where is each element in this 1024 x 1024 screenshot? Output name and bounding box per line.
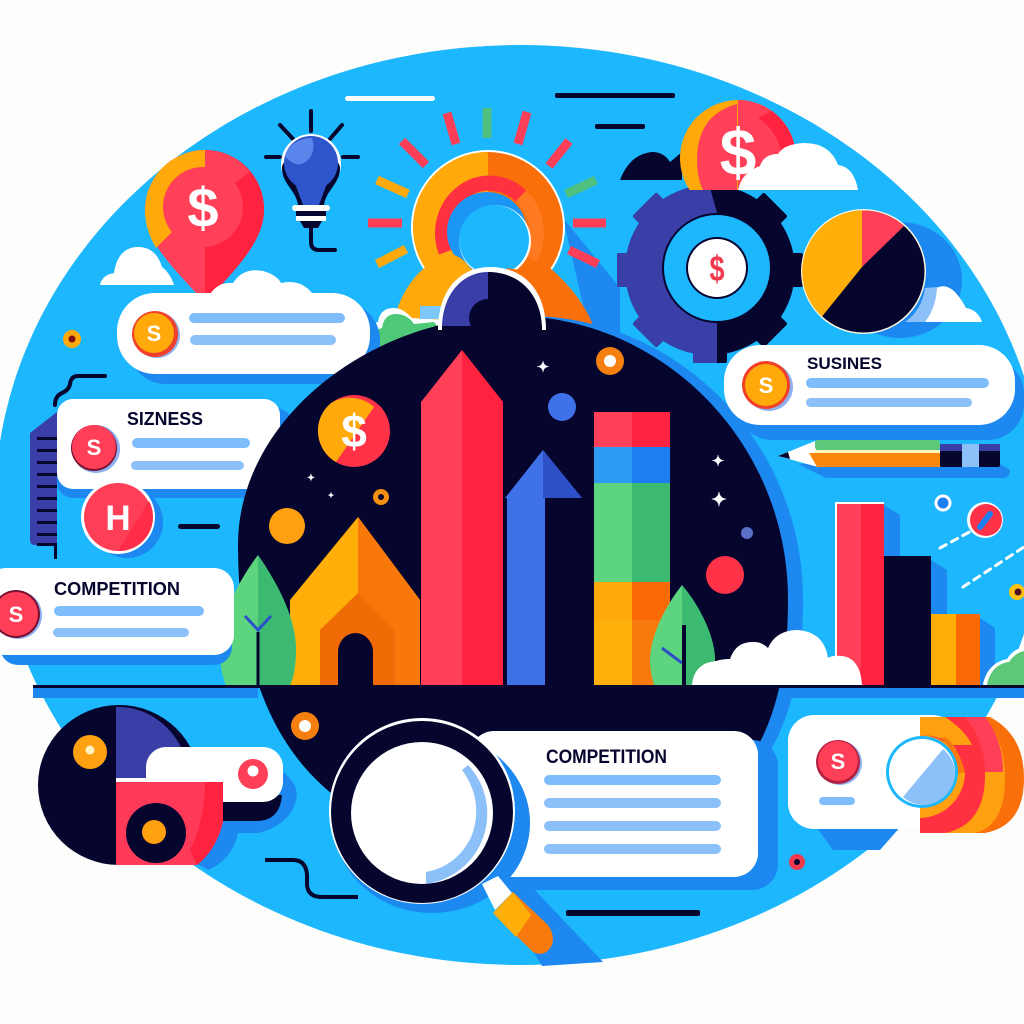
bar chart: main arrows xyxy=(421,350,670,685)
coin xyxy=(71,425,120,473)
card: top left xyxy=(117,293,380,384)
coin: S xyxy=(87,435,101,460)
icon: dark hill xyxy=(620,152,682,180)
scene: dark circle with shadow xyxy=(238,316,803,800)
dots and stars: ✦ xyxy=(307,473,315,484)
knob on top of dark circle xyxy=(438,267,546,337)
coin xyxy=(0,590,42,639)
icon: pie chart xyxy=(801,209,982,338)
card: right with lens xyxy=(788,715,1024,850)
icon: gear: $ xyxy=(710,248,724,289)
dots and stars: ✦ xyxy=(712,453,724,470)
lens stack xyxy=(886,717,1024,833)
right cloud xyxy=(692,630,862,685)
dots and stars: ✦ xyxy=(537,359,549,376)
card: sizness xyxy=(57,399,292,498)
small dot left xyxy=(63,330,81,348)
coin: dollar in dark circle: $ xyxy=(341,405,367,457)
coin: S xyxy=(147,321,161,346)
line bottom xyxy=(566,910,700,916)
blue arrow bar xyxy=(505,450,582,685)
icon: light bulb xyxy=(266,111,358,250)
icon: person with orange ring head xyxy=(397,150,600,335)
icon: bottom left camera circle xyxy=(38,705,297,870)
horizon line xyxy=(33,685,1024,698)
dash xyxy=(178,524,220,529)
squiggle line xyxy=(265,860,358,897)
dots and stars: ✦ xyxy=(328,491,335,500)
icon: dollar coin top right xyxy=(680,100,858,190)
card: competition left xyxy=(0,568,234,665)
coin xyxy=(816,740,862,785)
bar chart: right xyxy=(835,502,995,685)
label: COMPETITION xyxy=(546,747,667,768)
dots and stars xyxy=(269,347,753,594)
green bush behind dark circle xyxy=(367,306,448,360)
icon: right tree leaf xyxy=(650,585,715,685)
icon: location pin with dollar xyxy=(145,150,264,303)
icon: magnifying glass xyxy=(329,718,553,954)
label: SIZNESS xyxy=(127,409,203,429)
coin xyxy=(742,361,793,411)
dots and stars: ✦ xyxy=(711,490,727,511)
coin: S xyxy=(759,373,773,398)
icon: pencil xyxy=(778,440,1010,478)
shadow behind ring xyxy=(563,218,620,340)
cloud xyxy=(738,143,858,190)
stacked bar xyxy=(594,412,670,685)
icon: orange house xyxy=(290,517,420,685)
card: susines xyxy=(724,345,1024,440)
green bush right xyxy=(983,647,1024,685)
coin: dollar in dark circle xyxy=(318,395,390,467)
top lines xyxy=(345,93,675,129)
coin: S xyxy=(831,749,845,774)
bottom band shadow xyxy=(490,880,603,966)
card: competition main xyxy=(470,731,778,890)
coin: H xyxy=(81,480,163,558)
label: SUSINES xyxy=(807,354,882,373)
icon: dollar coin top right: $ xyxy=(720,115,756,189)
clouds behind first card xyxy=(100,247,319,305)
icon: gear xyxy=(617,177,803,363)
red arrow bar xyxy=(421,350,503,685)
dot bottom right xyxy=(789,854,805,870)
icon: location pin with dollar: $ xyxy=(187,176,219,239)
coin: H: H xyxy=(105,499,131,538)
icon: sun rays xyxy=(368,108,606,264)
icon: building with stripes xyxy=(30,376,105,559)
dot over dark circle xyxy=(291,712,319,740)
icon: left tree leaf xyxy=(220,555,296,685)
coin: S xyxy=(9,602,23,627)
coin xyxy=(132,311,180,358)
label: COMPETITION xyxy=(54,579,180,599)
dashed trend lines with markers xyxy=(936,496,1024,600)
